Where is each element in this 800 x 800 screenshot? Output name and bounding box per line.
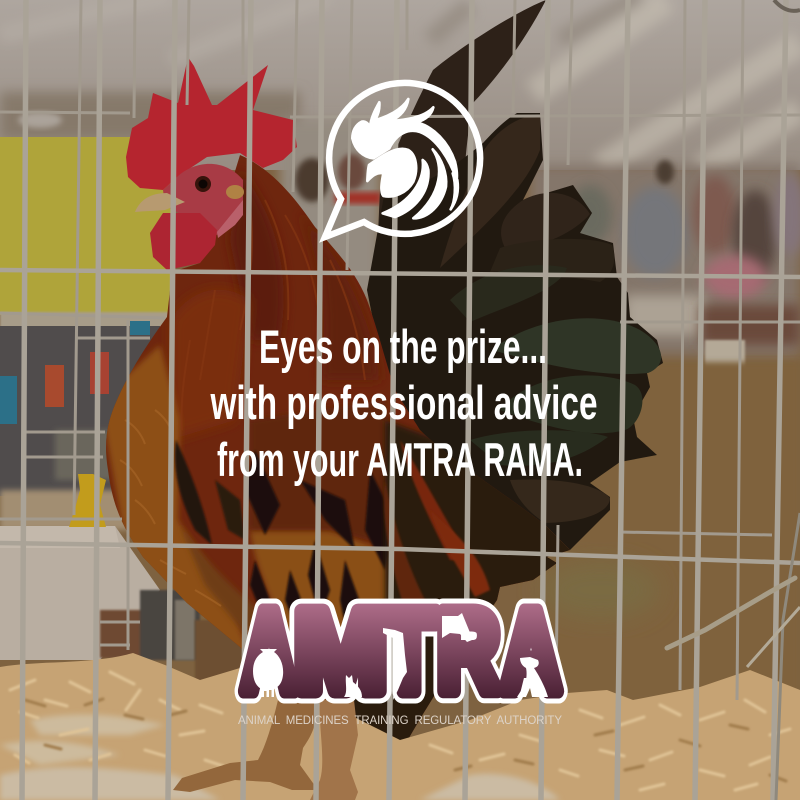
neck hackles	[230, 170, 284, 340]
rooster tail feathers	[367, 0, 663, 550]
rooster speech bubble logo	[325, 83, 480, 237]
wordmark white outline: A	[241, 586, 297, 716]
cat silhouette	[344, 675, 362, 697]
yellow board	[0, 137, 172, 315]
green tail sheen	[450, 265, 567, 322]
face	[163, 164, 243, 235]
blurred crowd	[530, 160, 800, 374]
wordmark gradient letters: T	[381, 586, 437, 716]
wordmark gradient letters: R	[437, 586, 500, 716]
wattle	[150, 213, 217, 270]
wordmark white outline: R	[437, 586, 500, 716]
wordmark white outline: T	[381, 586, 437, 716]
beak	[135, 193, 185, 212]
rooster legs and feet	[173, 700, 358, 800]
rooster body	[106, 155, 570, 740]
breast feathers	[106, 345, 242, 649]
lower dark tail coverts	[354, 418, 570, 740]
tall tail feather	[375, 0, 546, 300]
wood shavings floor	[0, 653, 800, 800]
comb	[126, 57, 297, 190]
horse silhouette	[383, 613, 472, 700]
feather texture	[213, 200, 366, 380]
wordmark gradient letters: M	[294, 586, 387, 716]
wordmark gradient letters	[241, 586, 561, 716]
AMTRA logo	[238, 586, 562, 727]
headline	[210, 320, 598, 486]
dog silhouette	[517, 657, 548, 697]
ear lobe pink	[217, 200, 243, 238]
cross wires	[0, 270, 800, 563]
white box lower left	[0, 526, 160, 660]
wordmark white outline	[241, 586, 561, 716]
cable tie	[667, 578, 795, 648]
headline line 1: Eyes on the prize...	[259, 320, 547, 373]
wordmark white outline: M	[294, 586, 387, 716]
wordmark gradient letters: A	[501, 586, 561, 716]
headline line 2: with professional advice	[210, 376, 598, 429]
speech bubble outline	[325, 83, 480, 237]
dark stall with coloured tubs	[0, 326, 160, 496]
icon: yellow feeder tag	[69, 474, 106, 527]
dark wing streaks	[175, 440, 212, 545]
wing orange panel	[184, 535, 326, 700]
rooster head, comb and wattle	[126, 57, 297, 270]
ear lobe	[226, 185, 244, 199]
tagline: ANIMAL MEDICINES TRAINING REGULATORY AUTHORITY	[238, 715, 562, 727]
black wing bars	[248, 450, 388, 620]
wordmark gradient letters: A	[241, 586, 297, 716]
dark tail mass	[367, 113, 663, 550]
eye	[195, 176, 211, 192]
rooster logo mark	[352, 99, 458, 218]
headline line 3: from your AMTRA RAMA.	[217, 433, 583, 486]
sheep silhouette	[253, 649, 283, 697]
wordmark white outline: A	[501, 586, 561, 716]
